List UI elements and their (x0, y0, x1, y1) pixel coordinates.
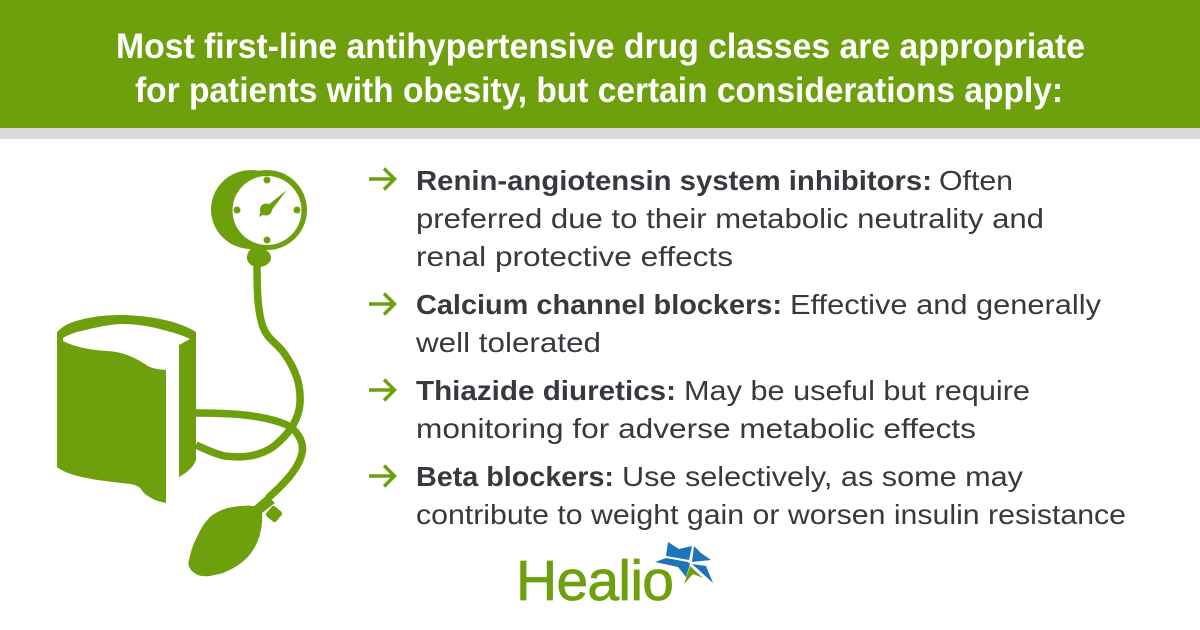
item: thiazide diuretics: monitoring for adverse metabolic effects (416, 413, 976, 444)
item: calcium channel blockers: well tolerated (415, 327, 601, 358)
item: renin-angiotensin system inhibitors: renal protective effects (416, 241, 733, 272)
item: calcium channel blockers (369, 289, 1101, 358)
cuff (57, 315, 196, 503)
arrow (369, 168, 394, 190)
arrow (369, 466, 394, 486)
header banner (0, 0, 1200, 139)
item: calcium channel blockers: Effective and generally (790, 289, 1101, 320)
item: renin-angiotensin system inhibitors: Renin-angiotensin system inhibitors: (416, 165, 932, 196)
list of drug classes (369, 165, 1126, 530)
title (116, 27, 1085, 110)
icon: blood pressure cuff and gauge (57, 170, 307, 576)
arrow (369, 294, 394, 314)
item: beta blockers: contribute to weight gain or worsen insulin resistance (416, 499, 1126, 530)
arrow (369, 380, 394, 400)
item: thiazide diuretics: Thiazide diuretics: (416, 375, 676, 406)
item: renin-angiotensin system inhibitors: Often (939, 165, 1013, 196)
item: thiazide diuretics: May be useful but require (684, 375, 1030, 406)
squeeze bulb (188, 495, 283, 576)
item: beta blockers: Beta blockers: (416, 461, 614, 492)
title: Most first-line antihypertensive drug classes are appropriate (116, 27, 1085, 66)
tubing (196, 262, 302, 498)
gauge (211, 170, 307, 267)
item: beta blockers (369, 461, 1126, 530)
item: beta blockers: Use selectively, as some may (622, 461, 1023, 492)
title: for patients with obesity, but certain considerations apply: (135, 71, 1063, 110)
item: thiazide diuretics (369, 375, 1030, 444)
item: renin-angiotensin system inhibitors: preferred due to their metabolic neutrality and (416, 203, 1044, 234)
item: calcium channel blockers: Calcium channel blockers: (416, 289, 782, 320)
Healio logo: Healio (516, 549, 674, 613)
icon: logo star (655, 542, 713, 584)
gauge knob (247, 246, 271, 267)
item: renin-angiotensin system inhibitors (369, 165, 1044, 272)
